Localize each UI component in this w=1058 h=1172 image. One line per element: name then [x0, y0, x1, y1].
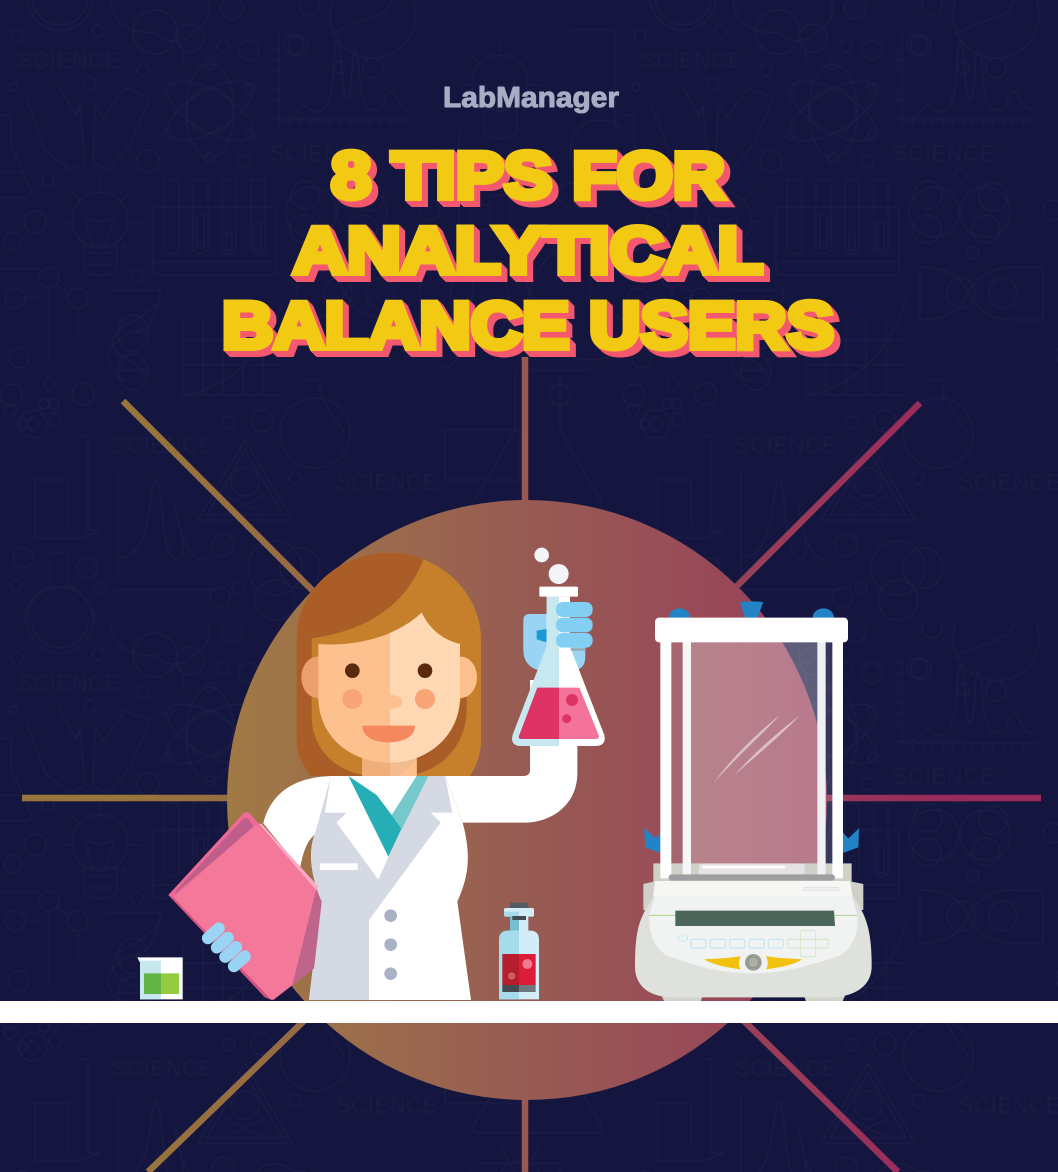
pocket — [320, 863, 358, 870]
left sleeve — [263, 776, 333, 868]
gradient circle — [227, 500, 827, 1100]
title — [222, 138, 834, 362]
mouth — [362, 726, 415, 742]
face — [318, 613, 460, 763]
coat buttons — [384, 909, 397, 980]
gloved hand on book — [199, 920, 253, 975]
icon: balance knobs — [644, 601, 859, 853]
balance buttons — [691, 939, 783, 948]
title: 8 TIPS FOR — [331, 138, 725, 212]
balance top plate — [653, 881, 853, 897]
shirt collar — [348, 776, 402, 857]
lab coat — [309, 776, 471, 1000]
balance base back — [643, 863, 863, 910]
flask stopper — [539, 587, 578, 597]
hair — [297, 553, 481, 776]
bottle — [499, 903, 539, 999]
thumb on flask — [537, 629, 547, 642]
yellow arrows — [704, 956, 802, 969]
beaker — [137, 957, 183, 999]
icon: power button — [678, 933, 687, 941]
sunburst rays — [22, 357, 1041, 1172]
shelf — [0, 1001, 1058, 1023]
flask hand palm — [523, 614, 585, 671]
balance control panel — [649, 887, 858, 973]
neck — [362, 753, 417, 815]
nose — [390, 695, 402, 709]
balance feet — [661, 993, 846, 1003]
title: ANALYTICAL — [293, 213, 763, 287]
eyes — [345, 663, 360, 678]
balance — [635, 601, 872, 1003]
logo: LabManager — [443, 82, 619, 114]
flask — [512, 548, 605, 746]
raised arm — [445, 680, 577, 823]
flask liquid — [519, 688, 559, 739]
balance body — [635, 895, 872, 997]
balance glass chamber — [671, 642, 832, 878]
balance display — [675, 911, 835, 926]
cheeks — [342, 689, 362, 709]
gloved fingers on flask — [556, 602, 593, 651]
bottle label — [502, 954, 519, 985]
bubbles — [549, 564, 569, 584]
title: BALANCE USERS — [222, 288, 834, 362]
balance frame posts — [655, 618, 848, 878]
folder book — [168, 812, 322, 1000]
dial — [745, 954, 762, 971]
weighing dish — [669, 864, 835, 881]
scientist and props — [137, 548, 605, 1000]
balance directional pad — [787, 930, 829, 957]
ears — [301, 657, 333, 698]
